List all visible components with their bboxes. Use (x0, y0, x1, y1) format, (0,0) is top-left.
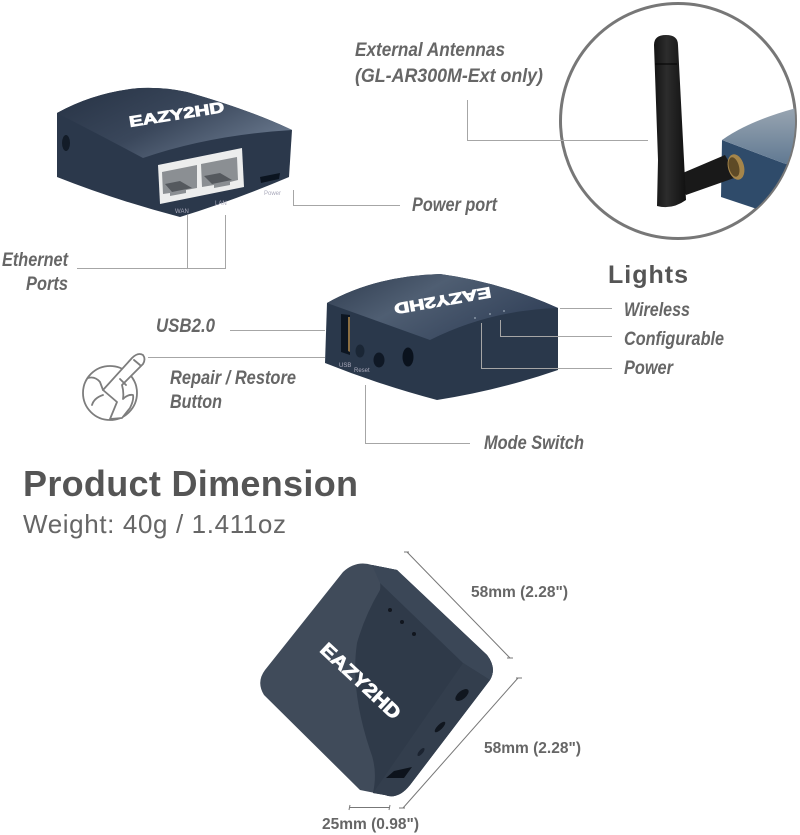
icon: finger press (83, 354, 144, 420)
leader line: mode switch (366, 385, 470, 444)
router: ports view (57, 88, 292, 217)
label: power: Power (624, 358, 674, 379)
leader line: antennas (468, 100, 648, 140)
leader lines: lights (482, 308, 612, 368)
label: external antennas (355, 40, 543, 87)
label: 58mm upper: 58mm (2.28") (471, 584, 568, 601)
router: usb view: Reset (354, 368, 370, 374)
leader line: repair (148, 356, 325, 358)
leader line: power port (294, 190, 400, 206)
label: usb2.0: USB2.0 (156, 316, 215, 337)
text: weight: Weight: 40g / 1.411oz (23, 509, 286, 539)
label: external antennas: External Antennas (355, 40, 505, 61)
label: external antennas: (GL-AR300M-Ext only) (355, 66, 543, 87)
dimension line: lower side (399, 678, 522, 808)
external antennas callout circle (560, 4, 800, 238)
label: 58mm lower: 58mm (2.28") (484, 740, 581, 757)
label: configurable: Configurable (624, 329, 724, 350)
label: wireless: Wireless (624, 300, 690, 321)
logo: EAZY2HD (393, 283, 492, 317)
router corner in lens (721, 108, 795, 208)
leader line: usb (230, 330, 325, 332)
heading: lights: Lights (608, 261, 688, 289)
usb port (341, 314, 350, 355)
dimension line: height (349, 805, 390, 810)
router: usb view: USB (339, 363, 351, 369)
ethernet port block (158, 148, 244, 204)
label: repair button: Button (170, 392, 222, 413)
label: ethernet ports (2, 250, 69, 295)
label: power port: Power port (412, 195, 498, 216)
power port (260, 173, 280, 183)
label: mode switch: Mode Switch (484, 433, 584, 454)
dimension line: upper side (404, 552, 513, 658)
antenna (654, 35, 747, 207)
leader line: ethernet ports (77, 215, 226, 268)
router: ports view: Power (264, 191, 281, 197)
logo: EAZY2HD (316, 639, 405, 724)
label: ethernet ports: Ports (26, 274, 68, 295)
router: ports view: LAN (215, 201, 227, 207)
logo: EAZY2HD (128, 99, 226, 131)
heading: product dimension: Product Dimension (23, 463, 358, 504)
label: repair button (170, 368, 296, 413)
router: usb view (325, 274, 558, 400)
label: 25mm: 25mm (0.98") (322, 816, 419, 833)
label: repair button: Repair / Restore (170, 368, 296, 389)
label: ethernet ports: Ethernet (2, 250, 69, 271)
router: ports view: WAN (175, 209, 189, 215)
router: top view (260, 564, 493, 796)
